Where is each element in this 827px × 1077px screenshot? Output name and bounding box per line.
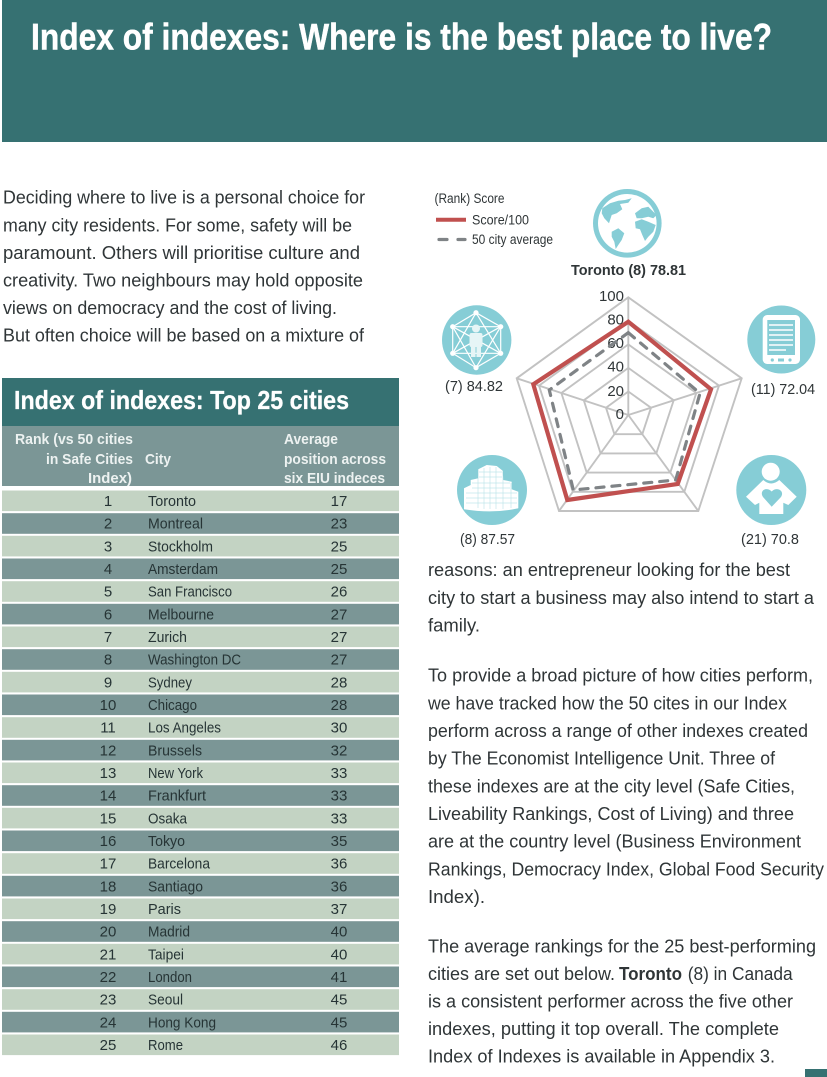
row 24: 24 xyxy=(100,1014,116,1031)
row 25 xyxy=(2,1034,399,1055)
row 17 xyxy=(2,853,399,874)
table column headers: City xyxy=(145,451,172,468)
row 15 xyxy=(2,808,399,828)
closing paragraph: indexes, putting it top overall. The complete xyxy=(428,1018,779,1039)
icon: tablet xyxy=(747,306,815,374)
row 3 xyxy=(2,536,399,556)
icon: office building xyxy=(457,455,527,525)
panel: top 25 cities table xyxy=(2,378,399,1055)
row 21: Taipei xyxy=(148,946,184,963)
closing paragraph: cities are set out below. xyxy=(428,963,615,984)
row 23 xyxy=(2,989,399,1010)
row 19: Paris xyxy=(148,901,181,918)
row 2: Montreal xyxy=(148,516,203,533)
row 23: 45 xyxy=(331,992,347,1009)
row 1 xyxy=(2,490,399,511)
closing paragraph: The average rankings for the 25 best-performing xyxy=(428,936,816,957)
row 9 xyxy=(2,672,399,692)
row 18: 36 xyxy=(331,878,347,895)
row 18 xyxy=(2,876,399,896)
axis labels: 100 xyxy=(599,288,624,305)
methodology paragraph: these indexes are at the city level (Safe Cities, xyxy=(428,775,795,796)
axis labels: 20 xyxy=(607,383,624,400)
methodology paragraph: we have tracked how the 50 cites in our Index xyxy=(427,692,788,713)
table column headers: position across xyxy=(284,451,386,468)
row 4: 25 xyxy=(331,561,347,578)
Toronto score line xyxy=(533,322,711,500)
row 15: 15 xyxy=(100,810,116,827)
radar grid xyxy=(517,297,742,511)
row 11: 11 xyxy=(100,720,116,737)
intro paragraph: views on democracy and the cost of living. xyxy=(3,297,337,318)
row 8 xyxy=(2,649,399,670)
row 25: 25 xyxy=(100,1037,116,1054)
row 16 xyxy=(2,830,399,851)
row 20: Madrid xyxy=(148,924,190,941)
row 16: 16 xyxy=(100,833,116,850)
closing paragraph: Toronto xyxy=(619,963,682,984)
row 2 xyxy=(2,513,399,534)
closing paragraph: (8) in Canada xyxy=(688,963,793,984)
row 12 xyxy=(2,740,399,760)
table title xyxy=(2,378,399,426)
row 20: 20 xyxy=(100,924,116,941)
row 20: 40 xyxy=(331,924,347,941)
intro paragraph: many city residents. For some, safety will be xyxy=(3,214,352,236)
row 2: 23 xyxy=(331,516,347,533)
methodology paragraph: Liveability Rankings, Cost of Living) and three xyxy=(428,803,794,824)
table column headers: Rank (vs 50 cities xyxy=(15,431,133,448)
label: lower-right axis score: (21) 70.8 xyxy=(741,531,799,548)
continuing paragraph: city to start a business may also intend to start a xyxy=(428,587,815,608)
row 21 xyxy=(2,944,399,964)
row 17: 36 xyxy=(331,856,347,873)
methodology paragraph: are at the country level (Business Environment xyxy=(428,831,801,852)
row 24 xyxy=(2,1012,399,1032)
row 2: 2 xyxy=(104,516,112,533)
row 7 xyxy=(2,626,399,647)
closing paragraph: Index of Indexes is available in Appendix 3. xyxy=(428,1046,775,1066)
row 7: 27 xyxy=(331,629,347,646)
row 7: 7 xyxy=(104,629,112,646)
methodology paragraph: Index). xyxy=(428,886,485,907)
intro paragraph: paramount. Others will prioritise culture and xyxy=(3,242,360,263)
row 6: Melbourne xyxy=(148,606,214,623)
row 23: 23 xyxy=(100,992,116,1009)
page corner tab xyxy=(805,1069,827,1077)
row 6: 6 xyxy=(104,606,112,623)
row 19: 37 xyxy=(331,901,347,918)
row 23: Seoul xyxy=(148,992,183,1009)
row 12: 12 xyxy=(100,742,116,759)
row 5 xyxy=(2,581,399,602)
row 3: 3 xyxy=(104,538,112,555)
row 14: 33 xyxy=(331,788,347,805)
row 10 xyxy=(2,694,399,715)
row 9: 9 xyxy=(104,674,112,691)
row 15: Osaka xyxy=(148,810,188,827)
row 8: 8 xyxy=(104,652,112,669)
table title: Index of indexes: Top 25 cities xyxy=(14,385,349,415)
closing paragraph: is a consistent performer across the five other xyxy=(428,990,793,1012)
row 1: Toronto xyxy=(148,493,196,510)
row 14: 14 xyxy=(100,788,116,805)
row 17: 17 xyxy=(100,856,116,873)
row 4: 4 xyxy=(104,561,112,578)
row 12: 32 xyxy=(331,742,347,759)
row 7: Zurich xyxy=(148,629,187,646)
row 21: 21 xyxy=(100,946,116,963)
axis labels: 80 xyxy=(607,312,624,329)
row 16: Tokyo xyxy=(148,833,185,850)
row 5: 26 xyxy=(331,584,347,601)
row 11 xyxy=(2,717,399,738)
table column headers: Index) xyxy=(88,470,132,487)
row 25: Rome xyxy=(148,1037,183,1054)
continuing paragraph xyxy=(428,559,815,636)
row 10: 28 xyxy=(331,697,347,714)
row 22: 41 xyxy=(331,969,347,986)
row 22 xyxy=(2,966,399,987)
row 10: 10 xyxy=(100,697,116,714)
row 20 xyxy=(2,921,399,942)
chart legend: Score/100 xyxy=(472,212,529,228)
row 6: 27 xyxy=(331,606,347,623)
icon: globe xyxy=(593,189,662,258)
header banner xyxy=(2,0,827,142)
table column headers: six EIU indeces xyxy=(284,470,385,487)
row 22: London xyxy=(148,969,192,986)
row 14 xyxy=(2,785,399,806)
row 11: 30 xyxy=(331,720,347,737)
icon: network person xyxy=(442,305,511,375)
label: left axis score: (7) 84.82 xyxy=(445,378,503,395)
methodology paragraph: by The Economist Intelligence Unit. Three of xyxy=(428,748,776,769)
row 19: 19 xyxy=(100,901,116,918)
intro paragraph xyxy=(3,186,365,346)
icon: person with heart xyxy=(736,455,806,525)
row 8: 27 xyxy=(331,652,347,669)
row 3: Stockholm xyxy=(148,538,213,555)
row 24: Hong Kong xyxy=(148,1014,216,1031)
chart legend: 50 city average xyxy=(472,232,553,247)
row 1: 17 xyxy=(331,493,347,510)
label: lower-left axis score: (8) 87.57 xyxy=(460,531,515,548)
row 12: Brussels xyxy=(148,742,202,759)
row 13: 33 xyxy=(331,765,347,782)
row 25: 46 xyxy=(331,1037,347,1054)
row 5: 5 xyxy=(104,584,112,601)
row 19 xyxy=(2,898,399,919)
row 13: 13 xyxy=(100,765,116,782)
row 5: San Francisco xyxy=(148,584,232,601)
intro paragraph: Deciding where to live is a personal choice for xyxy=(3,186,365,207)
row 10: Chicago xyxy=(148,697,197,714)
intro paragraph: But often choice will be based on a mixture of xyxy=(3,325,365,346)
row 18: 18 xyxy=(100,878,116,895)
chart legend: (Rank) Score xyxy=(434,191,504,206)
row 9: 28 xyxy=(331,674,347,691)
row 15: 33 xyxy=(331,810,347,827)
methodology paragraph: perform across a range of other indexes created xyxy=(428,720,808,741)
row 6 xyxy=(2,604,399,624)
50 city average line xyxy=(549,333,700,490)
methodology paragraph: To provide a broad picture of how cities perform, xyxy=(428,665,813,686)
row 17: Barcelona xyxy=(148,856,211,873)
row 24: 45 xyxy=(331,1014,347,1031)
intro paragraph: creativity. Two neighbours may hold opposite xyxy=(3,270,363,291)
chart legend xyxy=(434,191,553,247)
row 8: Washington DC xyxy=(148,652,241,669)
axis labels: 40 xyxy=(607,359,624,376)
row 9: Sydney xyxy=(148,674,192,691)
label: Toronto overall: Toronto (8) 78.81 xyxy=(571,263,686,279)
row 13: New York xyxy=(148,765,203,782)
row 21: 40 xyxy=(331,946,347,963)
row 11: Los Angeles xyxy=(148,720,221,737)
axis labels: 0 xyxy=(616,406,624,423)
table column headers: Average xyxy=(284,431,338,448)
closing paragraph xyxy=(428,936,816,1066)
row 18: Santiago xyxy=(148,878,203,895)
axis labels xyxy=(599,288,624,423)
row 1: 1 xyxy=(104,493,112,510)
row 22: 22 xyxy=(100,969,116,986)
methodology paragraph xyxy=(427,665,825,907)
row 4 xyxy=(2,558,399,579)
axis labels: 60 xyxy=(607,335,624,352)
row 3: 25 xyxy=(331,538,347,555)
row 4: Amsterdam xyxy=(148,561,218,578)
row 16: 35 xyxy=(331,833,347,850)
row 14: Frankfurt xyxy=(148,788,207,805)
continuing paragraph: reasons: an entrepreneur looking for the best xyxy=(428,559,790,580)
radar chart xyxy=(517,288,742,511)
label: right axis score: (11) 72.04 xyxy=(751,381,815,398)
row 13 xyxy=(2,762,399,783)
continuing paragraph: family. xyxy=(428,614,480,636)
table column headers: in Safe Cities xyxy=(46,451,133,468)
table column headers xyxy=(2,426,399,487)
